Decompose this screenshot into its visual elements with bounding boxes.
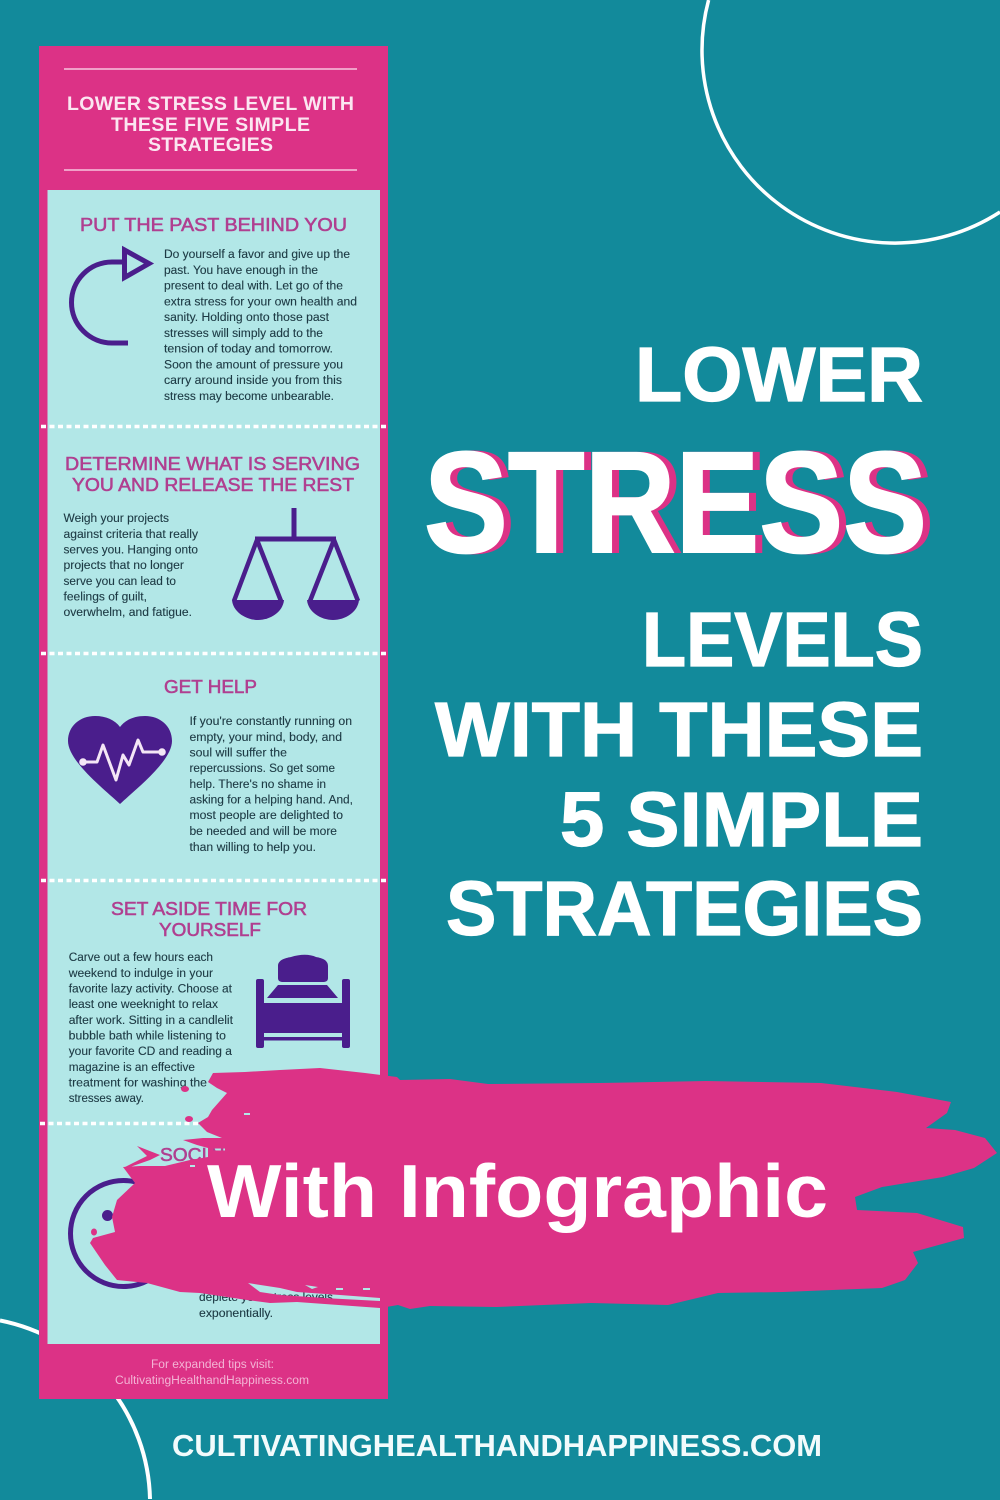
infographic title: THESE FIVE SIMPLE [111, 114, 310, 136]
banner label: With Infographic [207, 1149, 828, 1233]
icon: scales [232, 508, 359, 620]
infographic title: LOWER STRESS LEVEL WITH [67, 93, 354, 115]
icon: bed [256, 955, 350, 1048]
section 1 text: past. You have enough in the [164, 263, 318, 277]
website url: CULTIVATINGHEALTHANDHAPPINESS.COM [172, 1429, 822, 1463]
panel: infographic [39, 46, 388, 1399]
section 2 text: serves you. Hanging onto [64, 542, 198, 556]
headline: remaining lines: STRATEGIES [446, 866, 923, 952]
section 2 heading [65, 454, 360, 495]
section 2 heading: DETERMINE WHAT IS SERVING [65, 454, 360, 474]
section 5 text [199, 1290, 333, 1320]
icon: curved arrow [72, 250, 149, 343]
section 4 text: bubble bath while listening to [69, 1028, 226, 1042]
section 1 text: present to deal with. Let go of the [164, 278, 343, 292]
brush stroke banner [90, 1068, 997, 1309]
section 1 text: stress may become unbearable. [164, 389, 334, 403]
section 3 heading: GET HELP [164, 677, 257, 697]
section 4 text [68, 950, 234, 1105]
section 2 text: Weigh your projects [64, 511, 169, 525]
section 1 text: stresses will simply add to the [164, 326, 323, 340]
section 3 text: be needed and will be more [190, 824, 337, 838]
section 2 text: projects that no longer [64, 558, 184, 572]
section 4 text: magazine is an effective [69, 1060, 195, 1074]
section 1 heading: PUT THE PAST BEHIND YOU [80, 215, 347, 235]
section 1 text: carry around inside you from this [164, 373, 342, 387]
section 2 text: serve you can lead to [64, 574, 176, 588]
decorative circle: top right [702, 0, 1000, 243]
section 4 text: Carve out a few hours each [69, 950, 213, 964]
section 3 text: repercussions. So get some [190, 761, 335, 775]
section 1 text: tension of today and tomorrow. [164, 342, 333, 356]
section 3 text: help. There's no shame in [190, 777, 326, 791]
headline: remaining lines: LEVELS [642, 597, 923, 683]
section 4 text: treatment for washing the [69, 1076, 207, 1090]
section 1 text: sanity. Holding onto those past [164, 310, 330, 324]
section 1 text: Do yourself a favor and give up the [164, 247, 350, 261]
section 5 text: exponentially. [199, 1306, 273, 1320]
section 2 text: feelings of guilt, [64, 590, 147, 604]
section 3 text: most people are delighted to [190, 808, 343, 822]
section 4 text: weekend to indulge in your [68, 966, 213, 980]
section 5 text: deplete your stress levels [199, 1290, 333, 1304]
headline: STRESS: STRESS [424, 422, 927, 583]
section 4 heading: SET ASIDE TIME FOR [111, 899, 307, 919]
section 2 text: against criteria that really [64, 527, 199, 541]
headline: remaining lines: 5 SIMPLE [560, 777, 923, 863]
section 3 text [190, 714, 353, 854]
section 4 text: favorite lazy activity. Choose at [69, 982, 233, 996]
section 1 text: extra stress for your own health and [164, 294, 357, 308]
main headline [424, 332, 934, 952]
infographic footer [115, 1359, 309, 1387]
section 4 text: least one weeknight to relax [69, 997, 218, 1011]
icon: smiley circle [70, 1180, 176, 1286]
headline: STRESS shadow: STRESS [431, 422, 934, 583]
section 2 text: overwhelm, and fatigue. [64, 605, 192, 619]
section 3 text: soul will suffer the [190, 746, 287, 760]
headline: remaining lines [435, 332, 923, 952]
icon: heart with pulse [68, 716, 172, 804]
section 1 text: Soon the amount of pressure you [164, 358, 343, 372]
section 2 heading: YOU AND RELEASE THE REST [72, 475, 354, 495]
headline: remaining lines: WITH THESE [435, 687, 923, 773]
infographic title: STRATEGIES [148, 134, 273, 156]
section 3 text: If you're constantly running on [190, 714, 352, 728]
section 4 text: after work. Sitting in a candlelit [69, 1013, 234, 1027]
section 5 heading: SOCIALIZE [160, 1145, 260, 1165]
infographic footer: For expanded tips visit: [151, 1359, 274, 1371]
section 1 text [164, 247, 357, 403]
infographic footer: CultivatingHealthandHappiness.com [115, 1375, 309, 1387]
section 3 text: than willing to help you. [190, 840, 316, 854]
headline: remaining lines: LOWER [635, 332, 923, 418]
section 3 text: asking for a helping hand. And, [190, 792, 353, 806]
section 4 heading: YOURSELF [159, 920, 261, 940]
decorative circle: bottom left [0, 1320, 150, 1499]
section 4 text: your favorite CD and reading a [69, 1044, 232, 1058]
section 4 text: stresses away. [69, 1091, 144, 1105]
section 2 text [64, 511, 199, 619]
infographic title [64, 69, 357, 170]
section 3 text: empty, your mind, body, and [190, 730, 342, 744]
section 4 heading [111, 899, 307, 940]
